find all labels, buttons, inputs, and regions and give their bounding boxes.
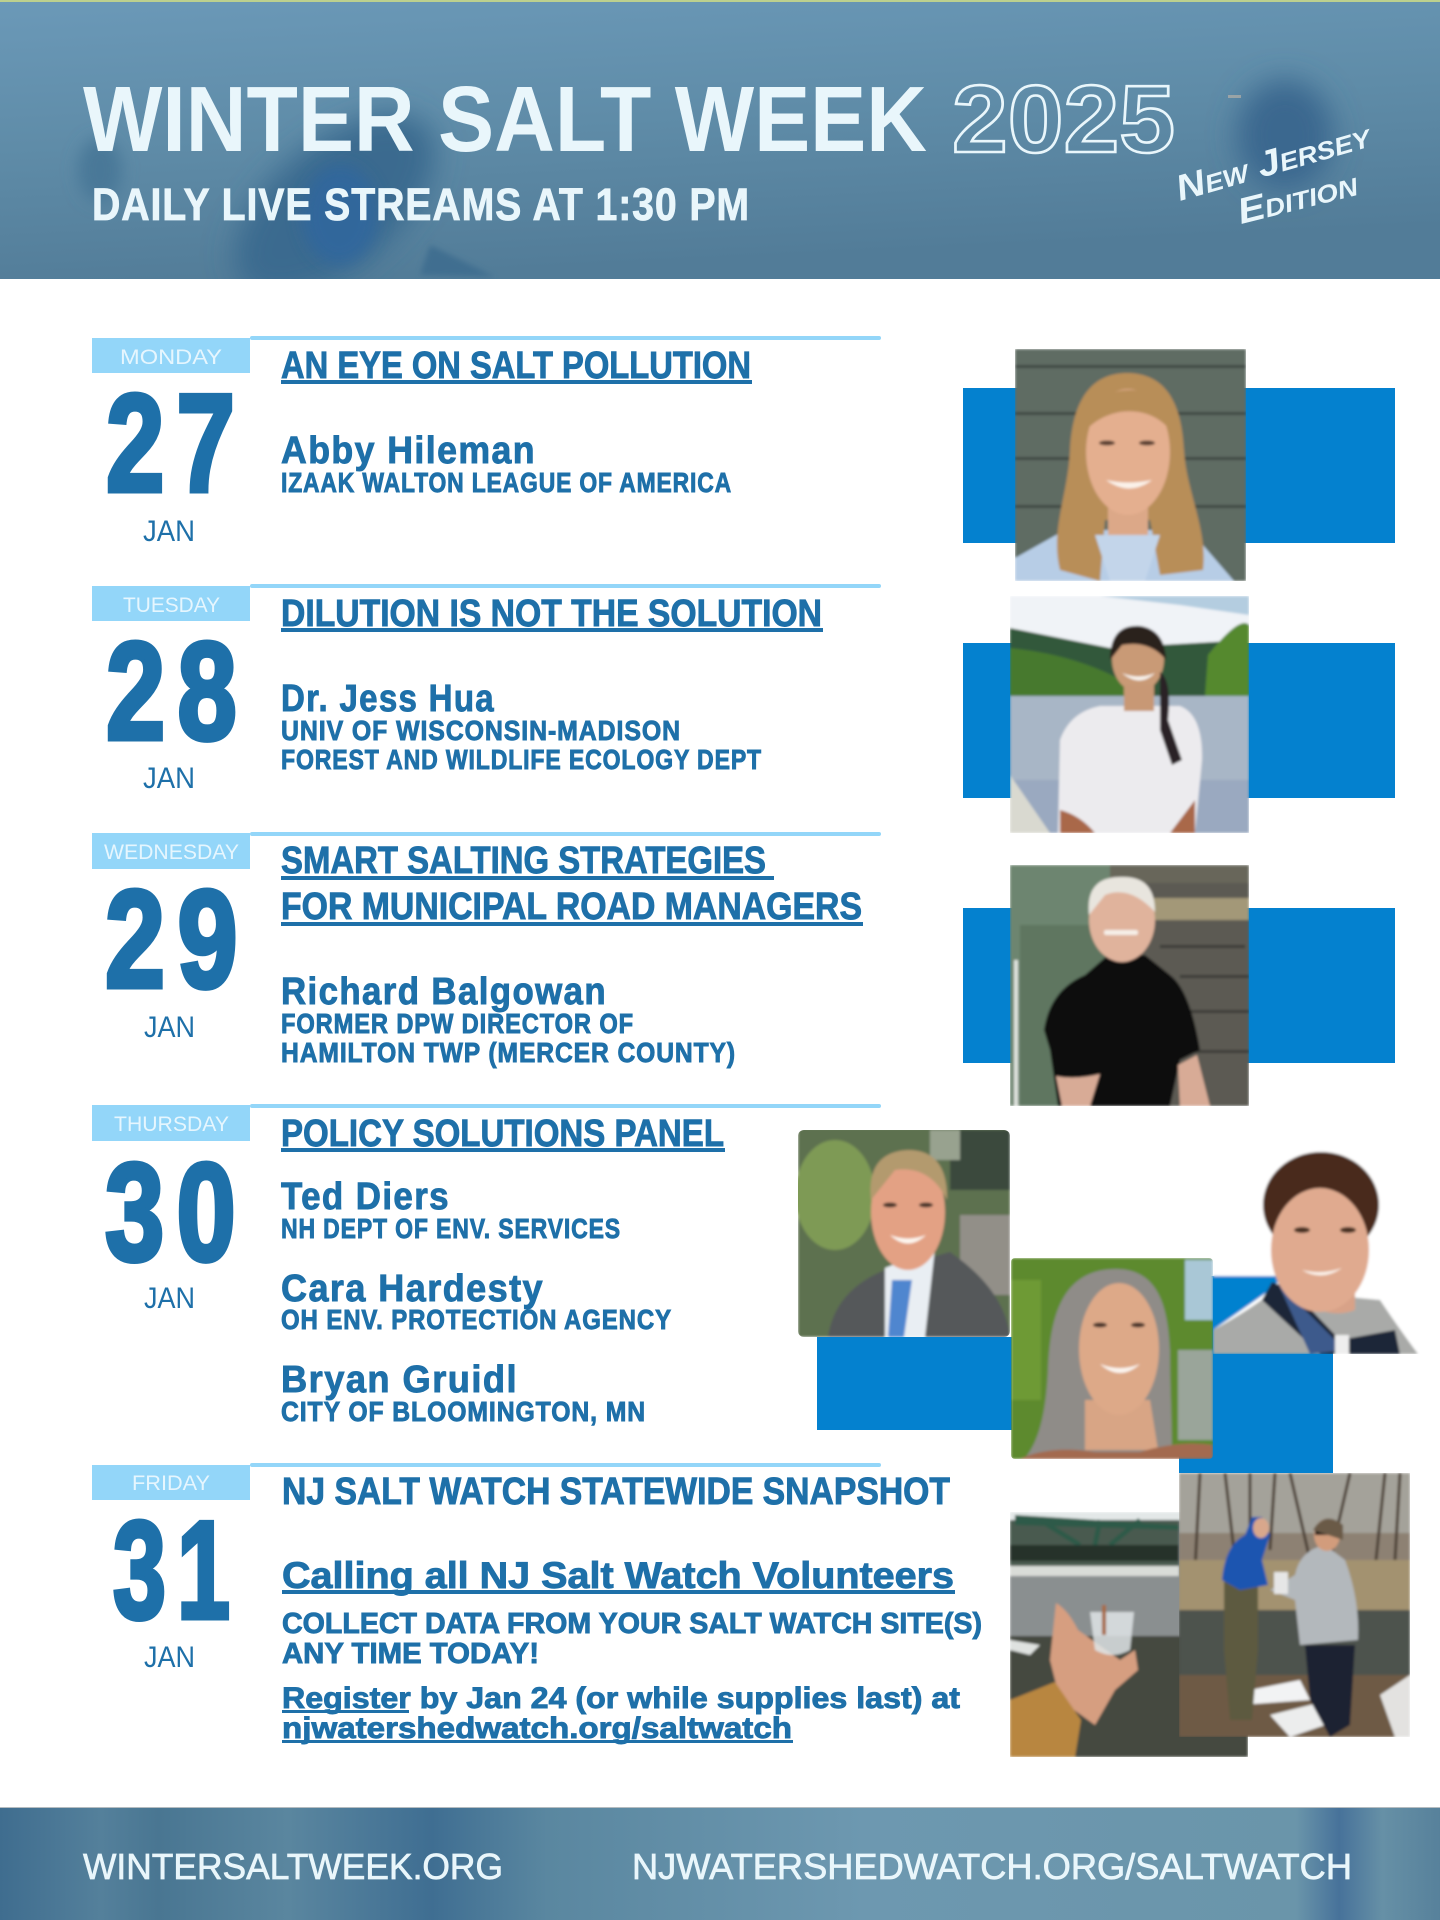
- day tab: TUESDAY: [123, 593, 220, 617]
- session title: SMART SALTING STRATEGIES: [281, 840, 766, 882]
- affiliation: [281, 715, 762, 775]
- session title: POLICY SOLUTIONS PANEL: [281, 1113, 724, 1155]
- speaker: Bryan Gruidl: CITY OF BLOOMINGTON, MN: [281, 1396, 646, 1427]
- instructions: ANY TIME TODAY!: [282, 1638, 539, 1670]
- photo: Richard Balgowan: [1010, 865, 1249, 1106]
- panel: Monday: [92, 336, 881, 548]
- month: JAN: [143, 762, 195, 795]
- date number: 27: [106, 366, 247, 521]
- speaker: Cara Hardesty: OH ENV. PROTECTION AGENCY: [281, 1304, 672, 1335]
- session title: DILUTION IS NOT THE SOLUTION: [281, 593, 822, 635]
- title: WINTER SALT WEEK: [83, 67, 927, 171]
- panel: Friday: [92, 1463, 982, 1745]
- speaker: Bryan Gruidl: Bryan Gruidl: [281, 1359, 518, 1401]
- affiliation: [281, 1008, 736, 1068]
- day tab: FRIDAY: [132, 1471, 210, 1495]
- speaker: Cara Hardesty: Cara Hardesty: [281, 1268, 544, 1310]
- photo: Salt Watch volunteers: [1179, 1473, 1410, 1737]
- registration: [282, 1682, 960, 1745]
- affiliation: UNIV OF WISCONSIN-MADISON: [281, 715, 681, 746]
- session title: [281, 840, 863, 928]
- edition tag: [1171, 113, 1377, 232]
- photo: Ted Diers: [795, 1128, 1010, 1337]
- edition tag: Edition: [1233, 162, 1362, 232]
- footer link: njwatershedwatch.org: NJWATERSHEDWATCH.ORG/SALTWATCH: [632, 1846, 1352, 1887]
- registration: njwatershedwatch.org/saltwatch: [282, 1712, 792, 1745]
- photo: Cara Hardesty: [1011, 1258, 1213, 1459]
- speaker: Abby Hileman: [281, 430, 536, 472]
- day tab: WEDNESDAY: [104, 840, 239, 864]
- affiliation: FOREST AND WILDLIFE ECOLOGY DEPT: [281, 744, 762, 775]
- call to volunteers: Calling all NJ Salt Watch Volunteers: [282, 1555, 954, 1596]
- footer banner: [0, 1807, 1440, 1920]
- photo: Jess Hua: [1010, 596, 1249, 833]
- date number: 29: [105, 862, 250, 1017]
- photo: water sample in hand: [1010, 1512, 1248, 1757]
- registration: Register by Jan 24 (or while supplies last) at: [282, 1682, 960, 1715]
- affiliation: HAMILTON TWP (MERCER COUNTY): [281, 1037, 736, 1068]
- date number: 31: [113, 1493, 241, 1648]
- month: JAN: [144, 1641, 195, 1674]
- day tab: MONDAY: [120, 345, 222, 369]
- header banner: [0, 0, 1440, 279]
- session title: NJ SALT WATCH STATEWIDE SNAPSHOT: [282, 1471, 950, 1513]
- speaker: Cara Hardesty: [281, 1268, 672, 1335]
- instructions: [282, 1608, 982, 1670]
- instructions: COLLECT DATA FROM YOUR SALT WATCH SITE(S): [282, 1608, 982, 1640]
- panel: Thursday: [92, 1104, 881, 1427]
- month: JAN: [144, 1282, 195, 1315]
- affiliation: IZAAK WALTON LEAGUE OF AMERICA: [281, 467, 732, 498]
- day tab: [92, 338, 250, 373]
- month: JAN: [144, 1011, 195, 1044]
- blue accent bars: [817, 388, 1395, 1473]
- session title: AN EYE ON SALT POLLUTION: [281, 345, 751, 387]
- panel: Wednesday: [92, 832, 881, 1068]
- day tab: [92, 1465, 250, 1500]
- day tab: [92, 1105, 250, 1141]
- speaker: Richard Balgowan: [281, 971, 607, 1013]
- blurred fish photo background: [76, 70, 1342, 279]
- day tab: [92, 833, 250, 869]
- panel: Tuesday: [92, 584, 881, 795]
- footer link: wintersaltweek.org: WINTERSALTWEEK.ORG: [83, 1846, 503, 1887]
- affiliation: FORMER DPW DIRECTOR OF: [281, 1008, 634, 1039]
- date number: 30: [105, 1135, 248, 1290]
- subtitle: DAILY LIVE STREAMS AT 1:30 PM: [92, 179, 750, 230]
- date number: 28: [106, 614, 249, 769]
- speaker: Ted Diers: NH DEPT OF ENV. SERVICES: [281, 1213, 621, 1244]
- title year outlined: 2025: [952, 66, 1175, 173]
- day tab: [92, 586, 250, 621]
- speaker: Bryan Gruidl: [281, 1359, 646, 1427]
- session title: FOR MUNICIPAL ROAD MANAGERS: [281, 886, 862, 928]
- day tab: THURSDAY: [114, 1112, 229, 1136]
- speaker: Dr. Jess Hua: [281, 678, 495, 720]
- edition tag: New Jersey: [1171, 113, 1377, 209]
- speaker: Ted Diers: [281, 1176, 621, 1244]
- photo: Abby Hileman: [1015, 349, 1246, 581]
- speaker: Ted Diers: Ted Diers: [281, 1176, 450, 1218]
- month: JAN: [143, 515, 195, 548]
- photo: Bryan Gruidl: [1213, 1148, 1420, 1354]
